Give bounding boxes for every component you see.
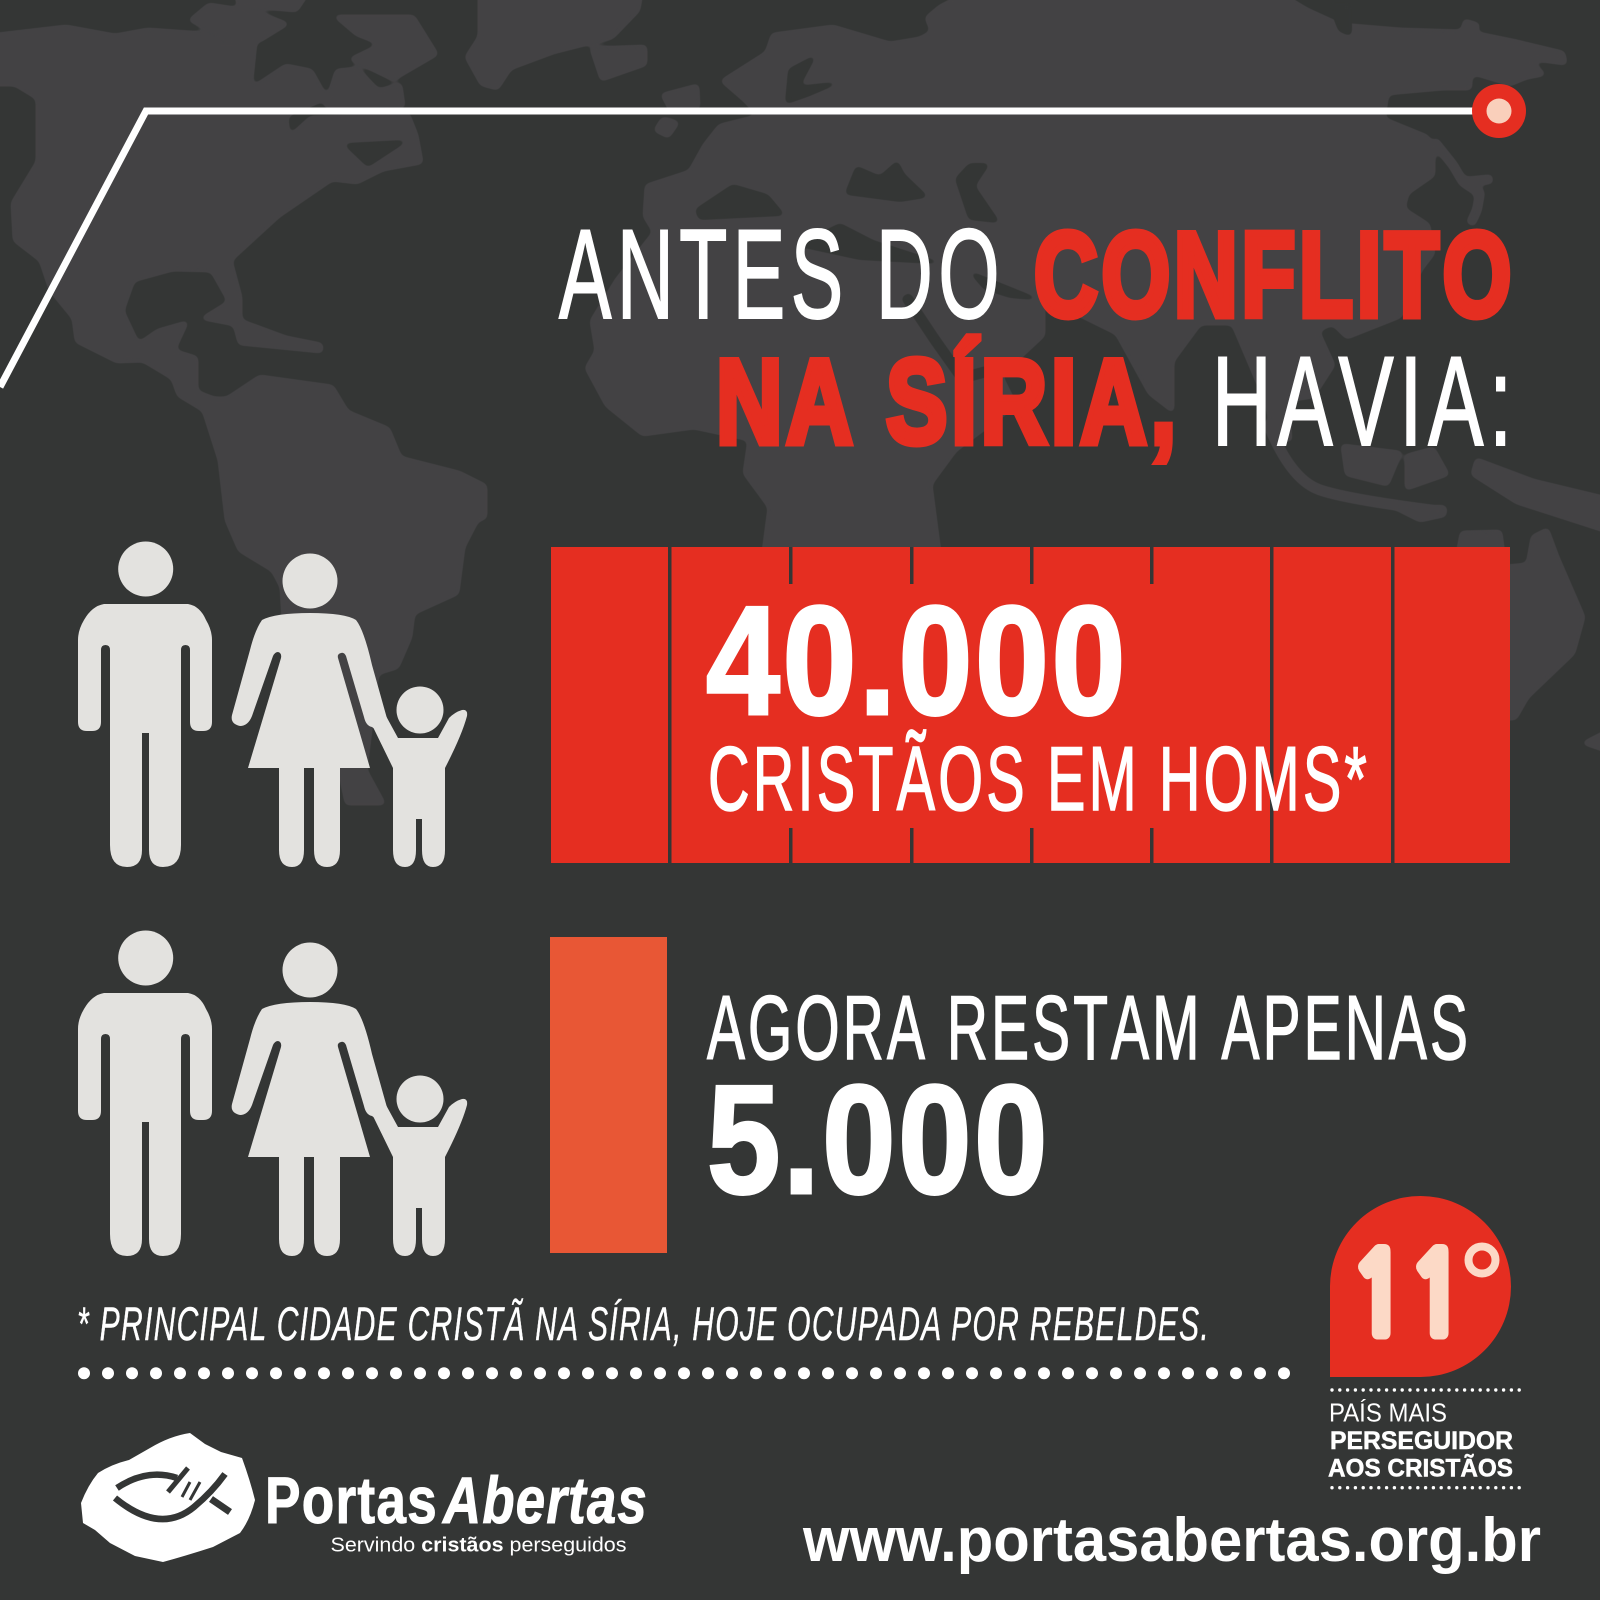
badge: 11th place — [1330, 1196, 1511, 1377]
world map background — [0, 0, 1600, 803]
panel: 40.000 christians bar — [551, 547, 1510, 863]
degree sign — [1468, 1246, 1496, 1274]
seas cut into the map — [347, 4, 1350, 378]
ranking caption: AOS CRISTÃOS — [1328, 1453, 1513, 1483]
text: now only 5.000 remain — [707, 978, 1471, 1226]
title: ANTES DO — [559, 203, 1005, 345]
dotted divider — [84, 1367, 1285, 1379]
logo: Portas Abertas: Abertas — [441, 1463, 648, 1537]
ranking caption — [1328, 1390, 1520, 1488]
icon: family after the conflict — [78, 930, 467, 1256]
marker dot — [1472, 84, 1526, 138]
logo mark: fish on rock — [81, 1433, 255, 1562]
logo: Portas Abertas — [81, 1433, 648, 1562]
number: 40.000: 40.000 — [706, 574, 1128, 747]
badge number: 11 — [1350, 1240, 1466, 1351]
connector line from the top marker — [0, 84, 1526, 387]
logo wordmark: Portas — [265, 1463, 438, 1537]
title — [559, 203, 1518, 472]
bar: remaining christians — [550, 937, 667, 1253]
number: 5.000: 5.000 — [707, 1053, 1050, 1226]
title: NA SÍRIA, — [716, 335, 1180, 469]
icon: family before the conflict — [78, 542, 467, 867]
website url: www.portasabertas.org.br — [802, 1506, 1541, 1575]
ranking caption: PAÍS MAIS — [1329, 1398, 1447, 1428]
ranking caption: PERSEGUIDOR — [1330, 1427, 1513, 1455]
logo tagline: Servindo cristãos perseguidos — [330, 1534, 626, 1556]
